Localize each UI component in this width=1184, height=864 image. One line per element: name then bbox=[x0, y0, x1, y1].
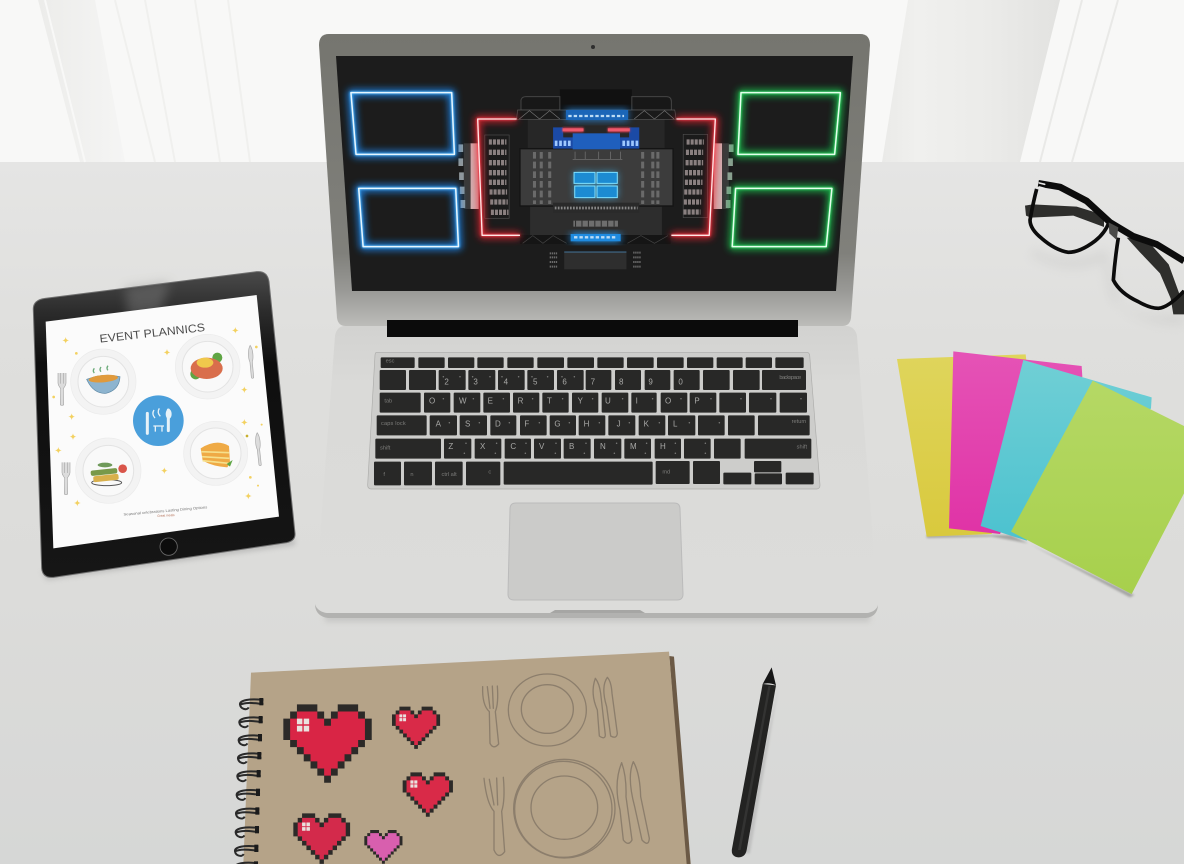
key legends: return bbox=[792, 419, 806, 425]
food: roast with greens bbox=[190, 353, 223, 379]
screen content bbox=[351, 89, 840, 269]
spiral binding bbox=[235, 698, 263, 864]
bottom row bbox=[375, 462, 813, 484]
key legends: cmd bbox=[488, 469, 670, 475]
key legends: 234567890 bbox=[444, 377, 683, 386]
notebook back cover bbox=[669, 656, 691, 864]
key legends: ••••••••••••• bbox=[442, 396, 802, 402]
tablet body bbox=[33, 272, 295, 577]
cyan note bbox=[981, 360, 1152, 541]
side cutlery bbox=[58, 345, 262, 495]
key legends: esc bbox=[386, 359, 395, 365]
laptop base bbox=[315, 326, 878, 618]
food: sandwich bbox=[90, 463, 127, 486]
neon blue frames bbox=[351, 93, 458, 247]
key legends: backspace bbox=[779, 375, 801, 381]
pixel heart large bbox=[283, 704, 372, 783]
sketch: small place setting bbox=[483, 674, 617, 747]
pixel heart pink bbox=[364, 830, 402, 864]
sticky notes bbox=[897, 351, 1184, 597]
sketch: large place setting bbox=[484, 759, 649, 858]
yellow note bbox=[897, 354, 1027, 537]
key legends: shift bbox=[380, 446, 391, 452]
glasses bridge bbox=[1109, 222, 1118, 240]
laptop shadow bbox=[325, 608, 870, 622]
notebook bbox=[235, 652, 691, 864]
seating panels bbox=[485, 134, 708, 218]
central blue screens bbox=[574, 172, 617, 198]
food: layered cake bbox=[201, 443, 233, 467]
key legends: shift bbox=[797, 444, 807, 450]
stage plan bbox=[517, 89, 676, 269]
laptop bbox=[315, 34, 878, 622]
letter row 3 bbox=[376, 440, 810, 458]
key legends bbox=[380, 359, 807, 478]
glasses shadow bbox=[1030, 248, 1184, 325]
side strips bbox=[461, 143, 731, 209]
neon green frames bbox=[732, 93, 840, 247]
center cutlery badge bbox=[133, 395, 184, 446]
function row bbox=[382, 358, 803, 367]
trackpad bbox=[508, 503, 683, 600]
glasses frame bbox=[1030, 183, 1184, 308]
tablet bbox=[33, 272, 295, 580]
key legends: •••••••••• bbox=[442, 374, 575, 380]
home button bbox=[160, 538, 177, 555]
key legends: tab bbox=[384, 398, 392, 404]
notebook page bbox=[243, 652, 687, 864]
neon red brackets bbox=[478, 119, 715, 235]
pen body bbox=[732, 684, 776, 857]
pixel heart lower bbox=[293, 813, 350, 864]
laptop lid and screen bbox=[319, 34, 870, 326]
food: soup bowl bbox=[87, 366, 120, 393]
key legends: OWERTYUIOP bbox=[429, 397, 700, 406]
tablet title: EVENT PLANNICS bbox=[99, 322, 206, 346]
key legends: ••••••••• bbox=[463, 451, 706, 457]
pen bbox=[732, 667, 778, 857]
keyboard plate bbox=[368, 352, 820, 489]
glasses arms bbox=[1025, 204, 1184, 314]
pixel heart small top bbox=[392, 707, 440, 749]
key legends: •••••••••• bbox=[448, 420, 720, 426]
pen shadow bbox=[742, 687, 778, 853]
pixel heart middle bbox=[403, 772, 453, 817]
hinge bbox=[387, 320, 798, 337]
hinge rivets bbox=[1039, 183, 1045, 188]
key legends: ZXCVBNMH bbox=[448, 442, 666, 451]
glasses bbox=[1025, 183, 1184, 325]
plates bbox=[71, 334, 248, 503]
key legends: caps lock bbox=[381, 421, 406, 427]
pink note bbox=[949, 351, 1082, 534]
tablet footer text: Seasonal celebrations Lasting Dining Options bbox=[123, 505, 208, 517]
curtains bbox=[0, 0, 1184, 162]
letter row 2 bbox=[378, 416, 809, 434]
tablet shadow bbox=[42, 538, 295, 580]
key legends: ASDFGHJKL bbox=[436, 419, 678, 428]
number row bbox=[381, 371, 805, 389]
tablet glare bbox=[125, 282, 170, 317]
sparkles bbox=[52, 327, 263, 506]
pen tip bbox=[763, 667, 776, 685]
notes shadow bbox=[927, 535, 1134, 597]
keyboard bbox=[368, 352, 820, 489]
letter row 1 bbox=[381, 394, 806, 412]
tablet footer text: Great meals bbox=[157, 513, 175, 518]
key legends: ••••••••• bbox=[465, 441, 706, 447]
green note bbox=[1011, 381, 1184, 594]
key legends: fn ctrl alt bbox=[383, 472, 457, 478]
tablet screen bbox=[46, 295, 279, 548]
